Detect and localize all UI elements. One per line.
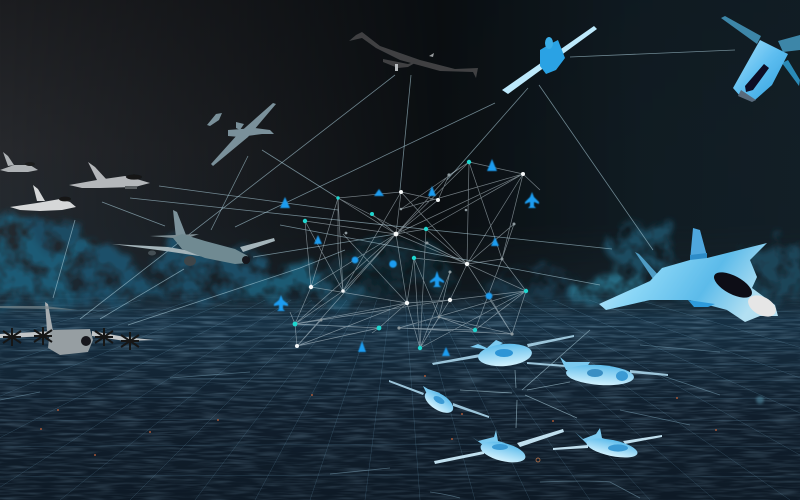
marker delta 6 bbox=[491, 237, 499, 246]
drone swarm bbox=[389, 335, 668, 466]
mesh nodes teal bbox=[293, 160, 528, 350]
propellers bbox=[3, 327, 139, 350]
blue aircraft markers bbox=[274, 159, 539, 356]
aircraft: transport bbox=[0, 302, 154, 355]
network mesh bbox=[290, 160, 540, 350]
marker blob 3 bbox=[486, 293, 492, 299]
sea surface bbox=[0, 290, 800, 500]
aircraft: next generation fighter bbox=[599, 228, 779, 322]
aircraft: MALE drone bbox=[207, 103, 276, 166]
marker plane 3 bbox=[274, 295, 288, 311]
drone 2 bbox=[527, 357, 668, 387]
drone 4 bbox=[434, 429, 564, 466]
sea perspective grid bbox=[0, 300, 800, 500]
sea glints and specks bbox=[0, 345, 764, 498]
mesh nodes grey bbox=[320, 173, 516, 336]
marker delta 4 bbox=[374, 189, 384, 196]
aircraft: fighter lower left bbox=[10, 185, 76, 211]
marker blob 2 bbox=[389, 260, 397, 268]
satellite: upper right bbox=[721, 16, 800, 102]
drone 3 bbox=[389, 380, 489, 418]
aircraft: fighter top left bbox=[0, 152, 38, 172]
marker delta 2 bbox=[487, 159, 497, 171]
mesh links bbox=[290, 162, 540, 348]
aircraft: HALE drone bbox=[349, 32, 478, 78]
clouds bbox=[0, 203, 800, 310]
background sky bbox=[0, 0, 600, 306]
marker delta 7 bbox=[358, 341, 366, 352]
marker delta 5 bbox=[314, 235, 322, 244]
marker blob 1 bbox=[352, 257, 358, 263]
marker delta 3 bbox=[428, 186, 436, 196]
aircraft: fighter centre left bbox=[69, 162, 150, 189]
marker plane 2 bbox=[430, 271, 444, 287]
aircraft: tanker bbox=[112, 210, 275, 266]
drone 1 bbox=[432, 335, 574, 368]
marker plane 1 bbox=[525, 192, 539, 208]
drone 5 bbox=[553, 428, 662, 461]
marker delta 8 bbox=[442, 347, 450, 356]
marker delta 1 bbox=[280, 197, 290, 208]
satellite: centre bbox=[502, 26, 597, 94]
mesh nodes white bbox=[295, 172, 525, 348]
long communication links bbox=[53, 50, 735, 428]
